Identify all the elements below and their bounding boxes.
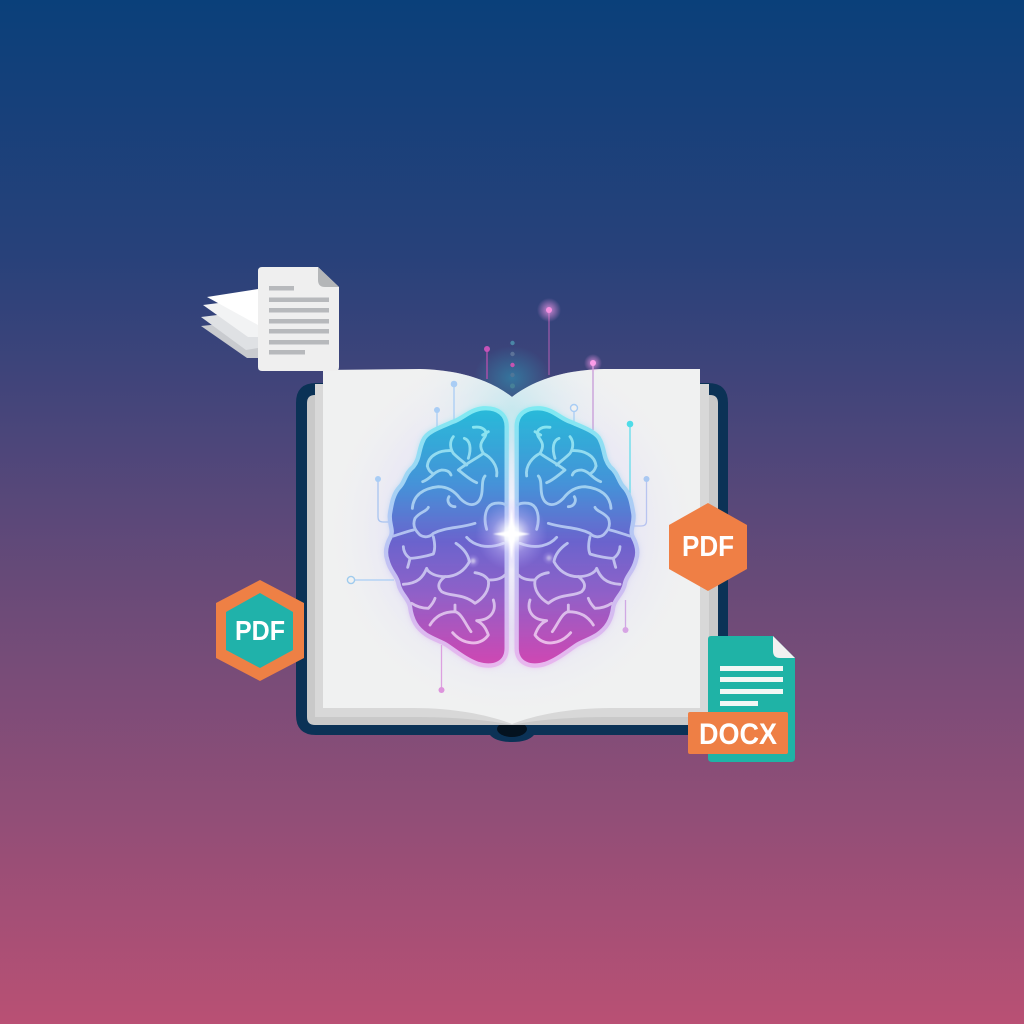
brain outer glow — [386, 408, 637, 665]
brain — [386, 408, 637, 665]
badge: PDF teal hexagon — [216, 580, 304, 681]
node: top left blue — [451, 381, 457, 422]
badge: PDF teal hexagon: PDF — [235, 615, 285, 646]
paper stack — [201, 289, 258, 358]
left hemisphere — [386, 408, 507, 665]
vertical dotted column — [510, 341, 515, 388]
node: left elbow blue — [375, 476, 392, 522]
node: lower right purple — [622, 600, 628, 633]
badge: PDF orange hexagon: PDF — [682, 531, 734, 563]
node: magenta above book — [484, 346, 490, 379]
circuit lines and nodes — [347, 298, 650, 693]
node: right cyan — [627, 421, 633, 498]
central light burst — [466, 440, 556, 630]
DOCX label — [688, 712, 788, 754]
node: right elbow blue — [634, 476, 650, 526]
node: glowing pink at page edge — [584, 354, 602, 430]
node: right hollow circle — [570, 404, 578, 423]
icon: DOCX file: DOCX — [699, 718, 777, 751]
DOCX sheet — [708, 636, 795, 762]
open book pages — [323, 369, 700, 724]
page stack edges — [307, 384, 718, 725]
node: bottom pink — [438, 645, 444, 693]
icon: DOCX file — [688, 636, 795, 762]
book — [296, 346, 728, 742]
node: tall glowing pink — [537, 298, 561, 375]
document fold — [318, 267, 339, 287]
DOCX lines — [720, 666, 783, 706]
DOCX fold — [773, 636, 795, 658]
right hemisphere — [517, 408, 637, 665]
document text lines — [269, 286, 329, 354]
icon: paper stack and document — [201, 267, 339, 371]
book cover — [296, 383, 728, 742]
node: left hollow circle — [347, 576, 394, 584]
document page — [258, 267, 339, 371]
gutter glow — [474, 346, 550, 410]
badge: PDF orange hexagon — [669, 503, 747, 591]
node: upper left blue — [434, 407, 440, 432]
